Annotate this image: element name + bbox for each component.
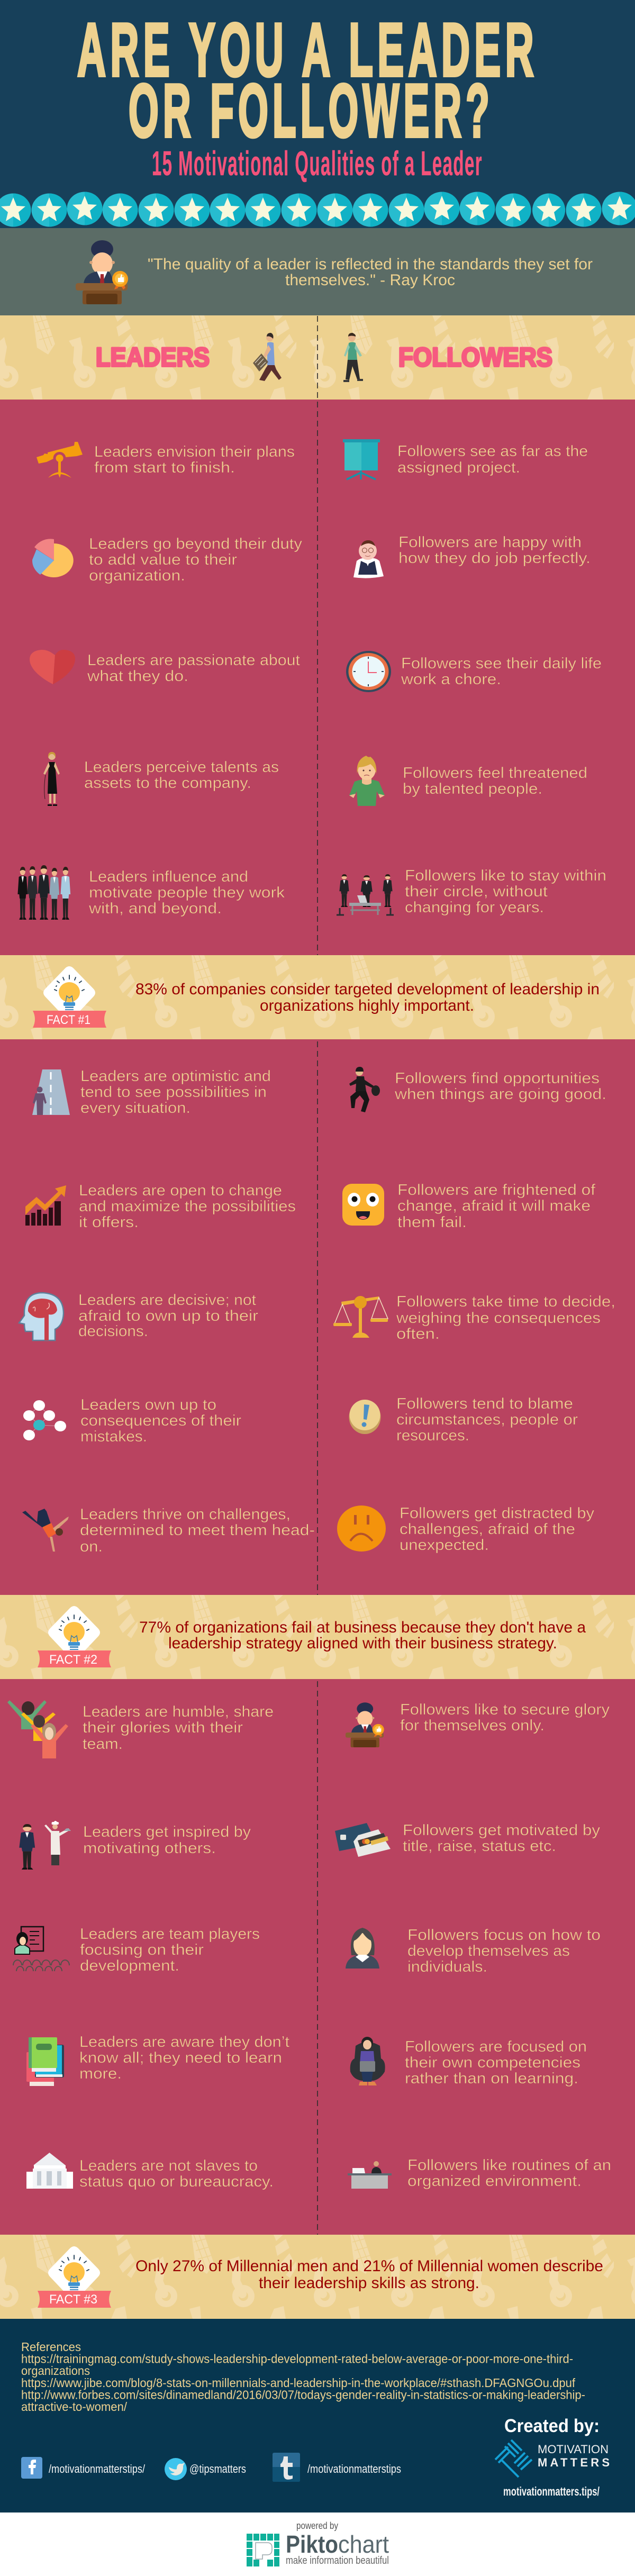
references: https://www.jibe.com/blog/8-stats-on-millennials-and-leadership-in-the-workplace/#sthash.DFAGNGOu.dpuf [21, 2376, 576, 2390]
item: leaders inspired [19, 1821, 251, 1870]
icon: heart [30, 650, 75, 684]
quote text: "The quality of a leader is reflected in the standards they set for [148, 256, 593, 273]
icon: person at desk [348, 2161, 392, 2189]
text: Followers like to stay within [405, 867, 606, 884]
item: leaders decisive [19, 1292, 259, 1340]
logo: motivation matters: MOTIVATION [538, 2443, 609, 2456]
text: weighing the consequences [396, 1310, 601, 1327]
item: followers motivated [335, 1822, 601, 1857]
logo: piktochart wordmark: Pikto [286, 2530, 338, 2558]
text: Leaders influence and [89, 868, 248, 885]
icon: fact 2 lightbulb badge: FACT #2 [49, 1653, 97, 1667]
panel: quote [0, 228, 635, 315]
icon: sad face [337, 1505, 386, 1552]
icon: rising chart arrow [25, 1185, 66, 1226]
text: with, and beyond. [88, 900, 222, 917]
text: Followers like to secure glory [400, 1701, 610, 1718]
icon: woman in black dress [43, 752, 60, 806]
text [397, 1182, 595, 1231]
text [400, 1701, 610, 1734]
item: followers take time [333, 1293, 615, 1343]
icon: road with figure [32, 1069, 70, 1115]
text: Leaders are open to change [79, 1182, 282, 1199]
text: motivating others. [83, 1840, 216, 1857]
heading: leaders: LEADERS [96, 342, 210, 372]
text: Followers are frightened of [397, 1182, 595, 1199]
fact 2 text [139, 1619, 586, 1652]
centre dashed divider [317, 316, 318, 2235]
text: to add value to their [89, 551, 238, 568]
text [79, 2157, 274, 2190]
text: Leaders are decisive; not [78, 1292, 256, 1309]
item: leaders thrive [22, 1506, 315, 1555]
text [396, 1395, 578, 1444]
panel: fact 3 [0, 2235, 635, 2319]
panel: section three background [0, 1679, 635, 2235]
text: their circle, without [405, 883, 548, 900]
text: Leaders go beyond their duty [89, 536, 303, 552]
logo: piktochart wordmark: make information beautiful [286, 2555, 389, 2566]
text [405, 2038, 587, 2087]
item: followers develop themselves [346, 1927, 601, 1975]
icon: thief with bag [349, 1067, 380, 1112]
text: rather than on learning. [405, 2070, 578, 2087]
references: organizations [21, 2364, 90, 2378]
icon: fact 1 lightbulb badge [33, 966, 106, 1028]
icon: group of people [17, 865, 70, 920]
text: on. [80, 1538, 103, 1555]
icon: exclamation badge [349, 1400, 381, 1434]
icon: teacher and audience [13, 1927, 69, 1971]
logo: piktochart wordmark: chart [338, 2530, 389, 2558]
text [80, 1506, 315, 1555]
item: followers threatened [349, 756, 587, 806]
references: attractive-to-women/ [21, 2400, 128, 2414]
text [87, 652, 300, 685]
text [394, 1070, 606, 1103]
panel: section two background [0, 1039, 635, 1595]
text: resources. [396, 1427, 469, 1444]
logo: piktochart mark [247, 2534, 279, 2566]
text: Followers see as far as the [397, 443, 588, 460]
item: leaders team players [13, 1926, 260, 1974]
icon: speaker at podium [76, 240, 128, 304]
icon: telescope [37, 442, 83, 478]
logo: piktochart wordmark [286, 2530, 389, 2566]
text [83, 1824, 251, 1857]
panel: footer [0, 2319, 635, 2512]
icon: balance scales [333, 1296, 388, 1338]
references [21, 2340, 585, 2414]
text: what they do. [87, 668, 188, 685]
item: followers distracted [337, 1505, 595, 1554]
text: Followers are focused on [405, 2038, 587, 2055]
text: Leaders are not slaves to [79, 2157, 258, 2174]
text [89, 536, 303, 584]
text: Followers focus on how to [407, 1927, 601, 1944]
icon: white institution building [26, 2153, 73, 2189]
text: Leaders get inspired by [83, 1824, 251, 1840]
text: and maximize the possibilities [79, 1198, 296, 1215]
text: Leaders are aware they don’t [79, 2034, 289, 2051]
item: leaders passionate [30, 650, 300, 685]
item: leaders open to change [25, 1182, 296, 1231]
icon: fact 3 lightbulb badge: FACT #3 [49, 2292, 97, 2307]
social: facebook: /motivationmatterstips/ [49, 2462, 146, 2475]
text: every situation. [80, 1100, 190, 1117]
text: development. [80, 1957, 179, 1974]
text: change, afraid it will make [397, 1198, 591, 1214]
text: their glories with their [83, 1719, 243, 1736]
icon: meeting at table [337, 874, 394, 915]
panel: column headers [0, 315, 635, 400]
social: twitter: @tipsmatters [189, 2462, 246, 2475]
item: followers daily life [346, 651, 602, 692]
text: organization. [89, 567, 185, 584]
text: by talented people. [403, 781, 542, 797]
item: leaders envision [37, 442, 295, 478]
text [79, 1182, 296, 1231]
icon: man with glasses [353, 540, 384, 578]
panel: section one background [0, 400, 635, 955]
icon: fact 2 lightbulb badge [38, 1606, 111, 1667]
text: decisions. [78, 1323, 148, 1340]
text [396, 1293, 615, 1343]
icon: bank cards [335, 1823, 391, 1857]
text [403, 1822, 601, 1855]
text: Followers are happy with [398, 534, 582, 551]
text: Followers find opportunities [395, 1070, 600, 1087]
text: tend to see possibilities in [80, 1084, 267, 1101]
title [77, 8, 538, 153]
text: individuals. [407, 1958, 487, 1975]
text [401, 655, 602, 688]
icon: molecule dots [23, 1400, 66, 1440]
text: status quo or bureaucracy. [79, 2173, 274, 2190]
text: changing for years. [405, 899, 544, 916]
text: Leaders are team players [80, 1926, 260, 1943]
text: title, raise, status etc. [403, 1838, 556, 1855]
item: leaders go beyond [32, 536, 303, 584]
text: Followers like routines of an [407, 2157, 611, 2174]
icon: presentation board [343, 439, 380, 479]
text [80, 1068, 271, 1117]
text: Followers get distracted by [400, 1505, 595, 1522]
item: followers are happy [353, 534, 591, 578]
text: more. [79, 2065, 122, 2082]
fact 1 text: 83% of companies consider targeted development of leadership in [135, 981, 600, 998]
icon: speaker with award [346, 1702, 384, 1747]
text: assigned project. [397, 459, 520, 476]
icon: walking follower [343, 333, 363, 382]
icon: worried person in green [349, 756, 385, 806]
text: assets to the company. [84, 775, 251, 792]
logo: motivation matters [495, 2440, 610, 2477]
icon: cheering people [7, 1700, 68, 1758]
text [405, 867, 606, 916]
text: Followers get motivated by [403, 1822, 601, 1839]
social: facebook [21, 2457, 146, 2479]
item: followers routines [348, 2157, 611, 2190]
icon: scared face [342, 1184, 384, 1226]
item: followers find opportunities [349, 1067, 606, 1112]
item: leaders influence [17, 865, 285, 920]
text [403, 765, 587, 797]
text: develop themselves as [407, 1943, 570, 1960]
text: unexpected. [400, 1537, 489, 1554]
text [84, 759, 279, 792]
text: Leaders are passionate about [87, 652, 300, 669]
text: Followers take time to decide, [396, 1293, 615, 1310]
item: leaders optimistic [32, 1068, 271, 1117]
item: leaders not slaves [26, 2153, 274, 2190]
icon: fact 1 lightbulb badge: FACT #1 [47, 1013, 90, 1027]
item: followers blame [349, 1395, 578, 1444]
icon: woman on laptop in chair [350, 2037, 385, 2085]
panel: fact 1 [0, 955, 635, 1039]
text: Followers see their daily life [401, 655, 602, 672]
social: twitter [165, 2458, 246, 2480]
panel: powered by Piktochart [0, 2512, 635, 2576]
icon: clock [346, 651, 391, 692]
created by heading: Created by: [504, 2416, 600, 2436]
quote text [148, 256, 593, 289]
icon: fact 3 lightbulb badge [38, 2246, 111, 2308]
icon: head with brain [19, 1293, 64, 1340]
text: circumstances, people or [396, 1411, 578, 1428]
references: https://trainingmag.com/study-shows-leadership-development-rated-below-average-or-poor-more-one-third- [21, 2352, 573, 2366]
star badges row [0, 192, 635, 226]
text: challenges, afraid of the [400, 1521, 575, 1538]
panel: fact 2 [0, 1595, 635, 1679]
text [94, 443, 295, 476]
text: Leaders are optimistic and [80, 1068, 271, 1085]
text [407, 1927, 601, 1975]
item: leaders own up [23, 1396, 242, 1445]
icon: breakdancer [22, 1509, 69, 1552]
text [407, 2157, 611, 2190]
text: Leaders envision their plans [94, 443, 295, 460]
fact 3 text: Only 27% of Millennial men and 21% of Millennial women describe [135, 2257, 603, 2275]
text: for themselves only. [400, 1717, 545, 1734]
text [397, 443, 588, 476]
text [80, 1926, 260, 1974]
references: References [21, 2340, 81, 2354]
text: it offers. [79, 1214, 139, 1231]
text: often. [396, 1326, 440, 1343]
header panel [0, 0, 635, 228]
logo: motivation matters: MATTERS [538, 2456, 610, 2469]
text: Followers tend to blame [396, 1395, 573, 1412]
website: motivationmatters.tips/ [503, 2484, 600, 2498]
item: leaders humble [7, 1700, 274, 1758]
text [400, 1505, 595, 1554]
heading: followers: FOLLOWERS [398, 342, 552, 372]
icon: walking leader [253, 333, 282, 381]
icon: woman bust [346, 1928, 379, 1969]
quote text: themselves." - Ray Kroc [285, 271, 455, 289]
references: http://www.forbes.com/sites/dinamedland/2016/03/07/todays-gender-reality-in-statistics-or-making-leadership- [21, 2388, 585, 2401]
fact 1 text [135, 981, 600, 1014]
item: followers stay within [337, 867, 606, 916]
item: followers competencies [350, 2037, 587, 2087]
icon: pie chart [32, 539, 74, 577]
item: leaders aware [26, 2034, 289, 2086]
text: know all; they need to learn [79, 2049, 282, 2066]
text [78, 1292, 259, 1340]
text: them fail. [397, 1214, 467, 1231]
text: Leaders perceive talents as [84, 759, 279, 776]
text: Followers feel threatened [403, 765, 587, 782]
text: afraid to own up to their [78, 1308, 259, 1325]
text: Leaders are humble, share [83, 1703, 274, 1720]
item: followers secure glory [346, 1701, 610, 1747]
text: Leaders own up to [80, 1396, 216, 1413]
text: work a chore. [401, 671, 501, 688]
text: from start to finish. [94, 459, 235, 476]
item: followers see as far [343, 439, 588, 479]
text [80, 1396, 242, 1445]
text [88, 868, 285, 917]
text: determined to meet them head- [80, 1522, 315, 1539]
text: consequences of their [80, 1412, 242, 1429]
icon: waiter and chef [19, 1821, 71, 1870]
text [398, 534, 591, 567]
social: tumblr [273, 2453, 401, 2482]
icon: stack of books [26, 2037, 64, 2086]
text [83, 1703, 274, 1753]
text: mistakes. [80, 1428, 147, 1445]
text: focusing on their [80, 1942, 204, 1958]
text [79, 2034, 289, 2082]
text: Leaders thrive on challenges, [80, 1506, 291, 1523]
text: how they do job perfectly. [398, 550, 591, 567]
text: motivate people they work [89, 884, 285, 901]
item: followers frightened [342, 1182, 595, 1231]
social: tumblr: /motivationmatterstips [307, 2462, 401, 2475]
text: their own competencies [405, 2054, 580, 2071]
fact 2 text: 77% of organizations fail at business because they don't have a [139, 1619, 586, 1636]
fact 2 text: leadership strategy aligned with their business strategy. [168, 1635, 557, 1652]
fact 3 text [135, 2257, 603, 2292]
text: team. [83, 1736, 123, 1753]
text: when things are going good. [394, 1086, 606, 1103]
item: leaders perceive talents [43, 752, 279, 806]
powered by text: powered by [296, 2520, 338, 2531]
fact 1 text: organizations highly important. [260, 997, 474, 1014]
text: organized environment. [407, 2173, 582, 2190]
fact 3 text: their leadership skills as strong. [259, 2274, 479, 2292]
